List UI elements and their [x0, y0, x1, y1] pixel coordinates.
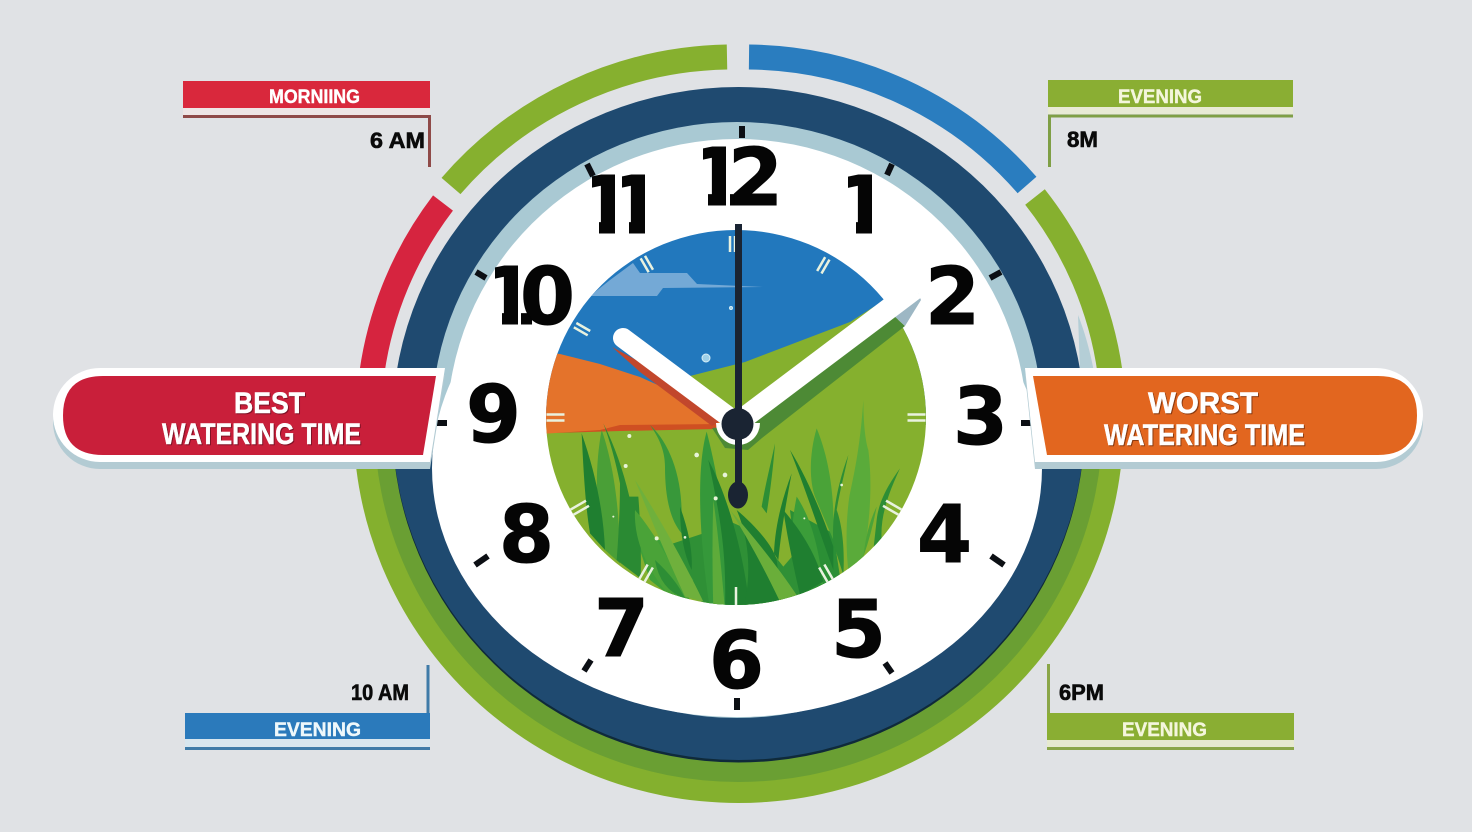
label text: evening: EVENING: [274, 719, 361, 741]
clock body: [354, 43, 1124, 803]
clock numerals: 4: [917, 489, 972, 581]
hour tick marks: [437, 126, 1031, 710]
label: evening 6PM: [1047, 664, 1294, 748]
green base crescent: [356, 469, 1121, 803]
arc: red left: [372, 203, 443, 372]
label: evening 10 AM: [185, 665, 430, 748]
time: 8M: 8M: [1067, 127, 1098, 152]
sky: [540, 225, 940, 425]
hour hand: [623, 338, 737, 423]
second hand: [735, 224, 742, 494]
clock numerals: 8: [499, 489, 554, 581]
water droplets in sky: [702, 306, 732, 362]
light blue inner ring: [432, 122, 1042, 718]
clock numerals: 10: [482, 251, 575, 343]
second hand counterweight: [728, 482, 748, 508]
clock numerals: 2: [925, 251, 980, 343]
minute hand: [737, 289, 915, 423]
white clock face: [432, 139, 1042, 717]
clock numerals: 3: [953, 371, 1008, 463]
label text: evening: EVENING: [1118, 86, 1202, 108]
clock numerals: 11: [579, 160, 664, 252]
time: 6PM: 6PM: [1059, 680, 1104, 705]
label text: evening: EVENING: [1122, 719, 1207, 741]
inner white double ticks: [546, 236, 926, 605]
arc: green right: [1035, 197, 1110, 372]
clock numerals: [466, 132, 1008, 707]
orange hill: [540, 352, 720, 434]
minute hand shadow: [712, 315, 905, 450]
callout text: best: BEST: [234, 387, 305, 420]
callout: best watering time: [53, 368, 445, 469]
time: 10 AM: 10 AM: [351, 680, 409, 705]
callout text: watering time: WATERING TIME: [1104, 419, 1305, 452]
label: morning 6 AM: [183, 81, 431, 167]
label text: morning: MORNIING: [269, 86, 360, 108]
callout text: worst: WORST: [1148, 387, 1258, 420]
clock numerals: 7: [594, 583, 649, 675]
cloud: [590, 263, 763, 296]
clock numerals: 5: [831, 584, 886, 676]
arc: green upper left: [451, 57, 727, 186]
hour hand shadow: [612, 347, 722, 426]
inner landscape scene: [540, 225, 940, 620]
time: 6 AM: 6 AM: [370, 128, 425, 153]
clock numerals: 12: [690, 132, 783, 224]
callout: worst watering time: [1025, 368, 1423, 469]
grass blades: [582, 400, 900, 610]
arc: blue upper right: [749, 57, 1027, 185]
segmented outer time ring: [372, 57, 1110, 372]
dew drops: [612, 434, 843, 540]
green field: [546, 306, 926, 605]
label: evening 8M: [1048, 80, 1293, 167]
clock hands: [612, 224, 921, 508]
light blue sliver behind bezel: [1078, 315, 1094, 372]
clock numerals: 9: [466, 369, 521, 461]
clock numerals: 1: [836, 160, 891, 252]
callout text: watering time: WATERING TIME: [162, 418, 361, 451]
center ring lower half: [716, 423, 760, 445]
clock numerals: 6: [709, 615, 764, 707]
minute hand shadow tip: [893, 293, 921, 326]
center pin: [722, 408, 754, 440]
navy bezel: [392, 87, 1084, 760]
